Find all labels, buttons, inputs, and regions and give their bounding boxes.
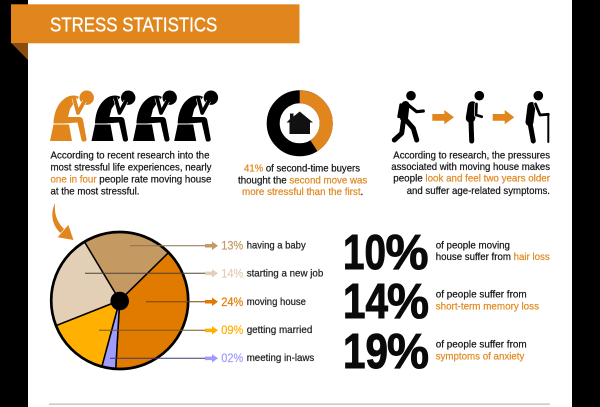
legend: having a baby: having a baby <box>247 240 307 252</box>
legend: meeting in-laws <box>110 353 314 365</box>
arrow: middle to old <box>493 110 514 124</box>
text: one in four: According to recent research into the <box>50 151 210 162</box>
legend: meeting in-laws: 02% <box>221 353 243 365</box>
arrow: young to middle <box>432 110 454 124</box>
text: second move: 41% of second-time buyers <box>244 164 360 175</box>
slice: meeting in-laws <box>102 300 120 369</box>
legend: getting married <box>99 325 313 337</box>
text: one in four: most stressful life experiences, nearly <box>50 163 212 174</box>
left black bar <box>0 0 28 407</box>
text: ageing <box>391 150 551 197</box>
stat: 10% hair loss: 10 <box>343 226 386 280</box>
legend: moving house: moving house <box>247 297 306 308</box>
stat: 19% anxiety: 19 <box>343 325 388 379</box>
stat: 19% anxiety <box>343 325 527 379</box>
legend: starting a new job: 14% <box>221 268 243 280</box>
stat: 10% hair loss: % <box>386 226 428 280</box>
slice: getting married <box>56 300 120 367</box>
stat: 10% hair loss: of people moving <box>436 240 510 251</box>
text: second move: more stressful than the first. <box>242 187 363 198</box>
legend: starting a new job <box>85 268 324 280</box>
panel: second move <box>238 90 367 198</box>
legend: getting married: getting married <box>247 325 313 336</box>
slice: having a baby <box>84 232 169 300</box>
legend: moving house <box>146 297 306 309</box>
legend: having a baby: 13% <box>221 240 243 252</box>
icon: stressed person orange <box>50 90 94 142</box>
icon: stressed person black 1 <box>92 90 135 142</box>
slice: moving house <box>116 252 188 369</box>
arrow: curved to pie <box>52 203 74 240</box>
icon: stressed person black 2 <box>133 90 177 142</box>
legend: moving house: 24% <box>221 297 243 309</box>
icon: elderly person with cane <box>530 91 548 142</box>
stat: 10% hair loss <box>343 226 550 280</box>
stat: 14% memory loss: short-term memory loss <box>436 301 539 312</box>
text: one in four <box>50 151 212 198</box>
stat: 14% memory loss: % <box>387 275 429 329</box>
icon: stooped person <box>470 91 484 141</box>
text: ageing: people look and feel two years older <box>393 174 551 185</box>
legend: getting married: 09% <box>221 325 243 337</box>
text: second move <box>238 164 367 198</box>
text: ageing: and suffer age-related symptoms. <box>407 186 550 197</box>
icon: stressed person black 3 <box>174 90 218 142</box>
stat: 19% anxiety: of people suffer from <box>436 340 527 351</box>
legend: meeting in-laws: meeting in-laws <box>247 353 314 364</box>
stat: 19% anxiety: symptoms of anxiety <box>436 351 525 362</box>
title banner <box>11 4 300 60</box>
icon: walking person <box>394 91 423 140</box>
panel: ageing <box>391 91 551 197</box>
text: ageing: associated with moving house makes <box>391 162 550 173</box>
pie outline <box>51 232 188 369</box>
text: ageing: According to research, the pressures <box>393 150 550 161</box>
legend: having a baby <box>130 240 307 252</box>
stat: 14% memory loss: of people suffer from <box>436 289 527 300</box>
right black bar <box>572 0 600 407</box>
stat: 14% memory loss <box>343 275 539 329</box>
panel: one in four <box>50 90 218 198</box>
pie hub <box>110 292 129 310</box>
text: one in four: one in four people rate moving house <box>50 175 212 186</box>
legend: starting a new job: starting a new job <box>247 268 324 280</box>
stat: 10% hair loss: house suffer from hair loss <box>436 252 550 263</box>
text: one in four: at the most stressful. <box>50 186 140 198</box>
stat: 19% anxiety: % <box>387 325 429 379</box>
pie chart <box>51 232 188 369</box>
title banner: STRESS STATISTICS <box>50 15 217 37</box>
slice: starting a new job <box>51 242 120 326</box>
text: second move: thought the second move was <box>238 175 367 186</box>
icon: donut chart with house <box>273 90 333 151</box>
stat: 14% memory loss: 14 <box>343 275 388 329</box>
